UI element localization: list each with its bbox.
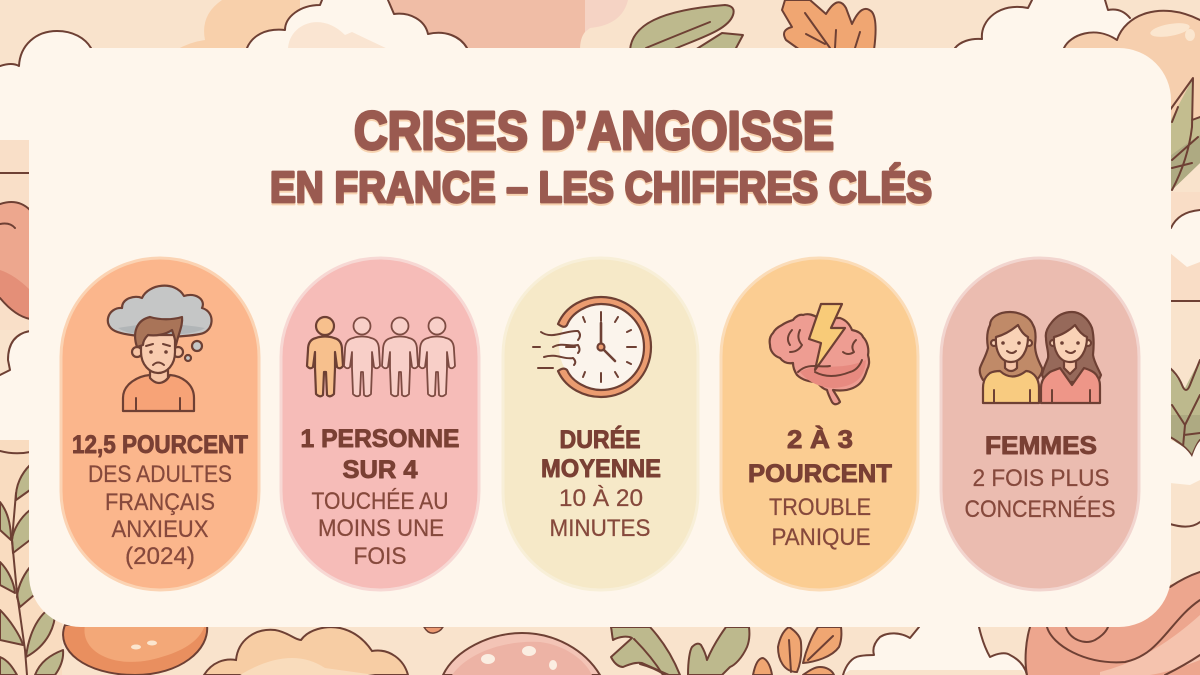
title: EN FRANCE – LES CHIFFRES CLÉS	[270, 162, 932, 212]
panel: card 5 women	[941, 258, 1139, 590]
text: 1 person in 4: MOINS UNE	[318, 515, 444, 542]
bottom left branch	[0, 465, 63, 675]
text: average duration	[541, 425, 661, 542]
text: average duration: MOYENNE	[541, 455, 661, 483]
text: 12,5 percent: FRANÇAIS	[105, 489, 215, 516]
text: 2 to 3 percent: 2 À 3	[787, 425, 853, 454]
text: 12,5 percent: ANXIEUX	[112, 516, 208, 543]
text: women twice as affected	[964, 432, 1116, 523]
text: 2 to 3 percent: PANIQUE	[772, 524, 870, 551]
bottom orange blob	[63, 625, 207, 675]
text: average duration: DURÉE	[560, 425, 640, 454]
text: 1 person in 4: FOIS	[354, 543, 406, 570]
left side	[0, 140, 30, 330]
text: women twice as affected: FEMMES	[985, 432, 1097, 460]
bottom green leaves	[611, 627, 680, 675]
text: women twice as affected: CONCERNÉES	[964, 496, 1116, 523]
bottom pink ball	[443, 633, 600, 675]
title: CRISES D’ANGOISSE	[354, 101, 834, 161]
text: 1 person in 4: TOUCHÉE AU	[312, 488, 448, 515]
text: 12,5 percent: DES ADULTES	[88, 461, 232, 488]
panel: card 3 duration	[503, 258, 698, 590]
right leaves	[1165, 78, 1200, 190]
text: 12,5 percent	[72, 431, 248, 570]
text: 12,5 percent: 12,5 POURCENT	[72, 431, 248, 459]
title	[270, 101, 932, 212]
text: 2 to 3 percent: POURCENT	[748, 460, 892, 488]
text: average duration: MINUTES	[550, 515, 650, 542]
panel: card 2 one in four	[281, 258, 479, 590]
text: 1 person in 4: SUR 4	[342, 456, 418, 484]
bottom orange leaves	[753, 658, 772, 675]
top oak leaf	[782, 0, 876, 50]
bottom cloud	[204, 627, 408, 675]
top green leaves	[630, 5, 734, 50]
icon: two women	[980, 312, 1101, 403]
bottom right cloud	[843, 627, 1027, 675]
icon: brain with lightning	[770, 304, 869, 404]
text: 2 to 3 percent	[748, 425, 892, 551]
text: average duration: 10 À 20	[559, 485, 643, 512]
icon: worried person under cloud	[108, 286, 212, 411]
text: 2 to 3 percent: TROUBLE	[769, 494, 871, 521]
text: 1 person in 4	[300, 425, 460, 570]
top right blob	[1064, 11, 1200, 135]
panel: card 4 panic disorder	[721, 258, 918, 590]
text: 1 person in 4: 1 PERSONNE	[300, 425, 460, 453]
text: 12,5 percent: (2024)	[125, 543, 195, 570]
bottom right swirl	[1026, 572, 1200, 675]
icon: fast clock	[533, 297, 651, 397]
top right cloud	[955, 0, 1132, 50]
icon: four people	[307, 317, 455, 396]
text: women twice as affected: 2 FOIS PLUS	[972, 465, 1110, 492]
panel: card 1 adults	[61, 258, 259, 590]
